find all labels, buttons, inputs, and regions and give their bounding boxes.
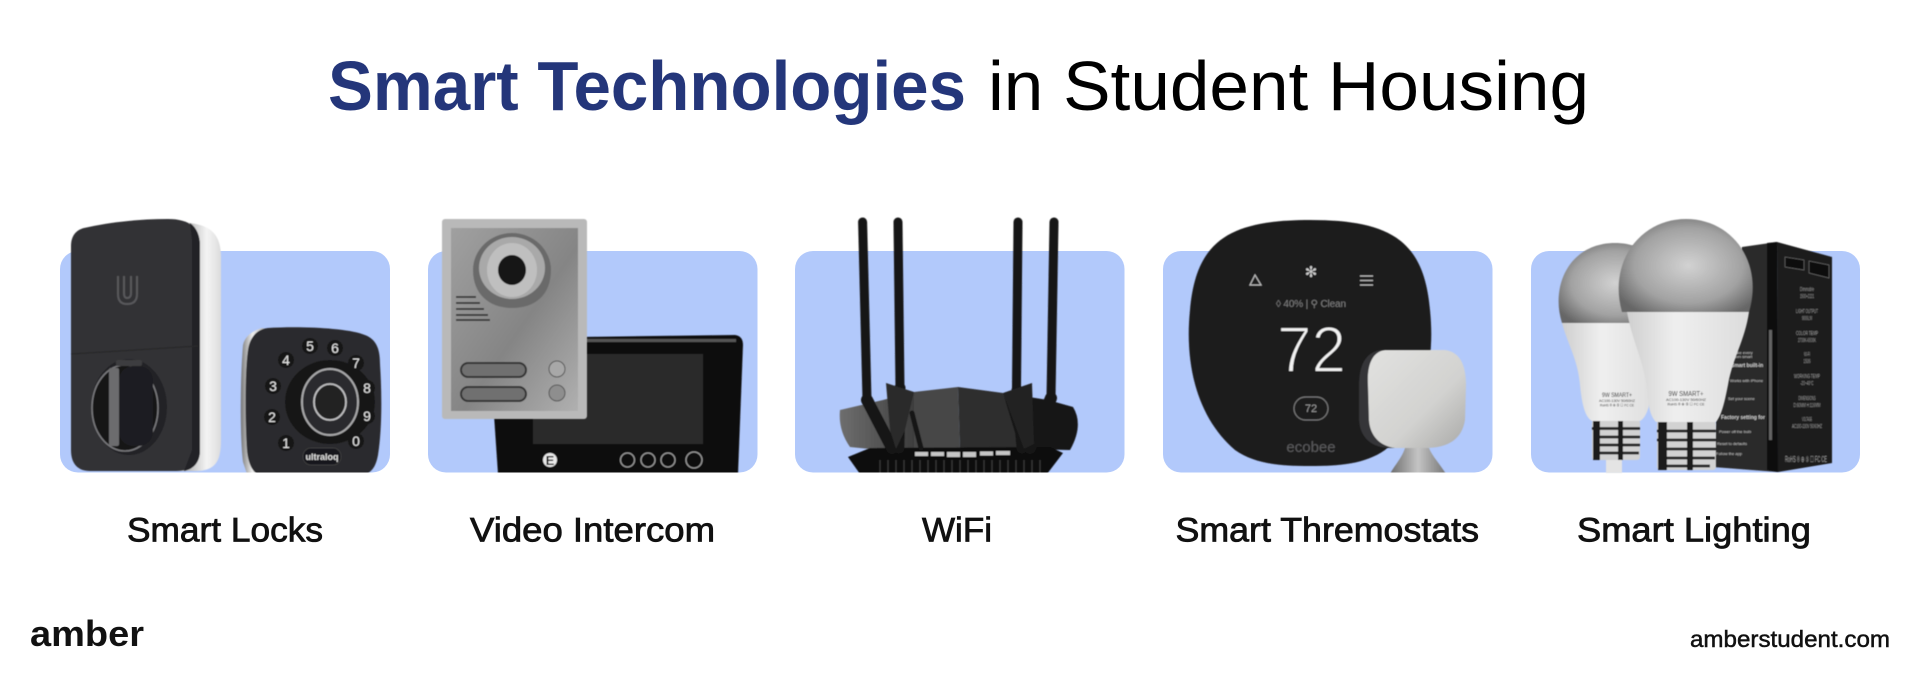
icon: intercom monitor: E: [546, 453, 555, 468]
panel: smart lighting: [1531, 219, 1860, 473]
icon: intercom monitor: [494, 335, 743, 474]
icon: ecobee thermostat: [1189, 220, 1431, 466]
icon: product box: 9006LM: [1802, 316, 1812, 322]
panel: smart thermostats: [1163, 220, 1492, 474]
icon: wifi router: [840, 222, 1078, 474]
icon: product box: 2700K-6500K: [1798, 338, 1816, 344]
icon: keypad lock: [241, 327, 381, 476]
icon: keypad lock: 7: [352, 355, 360, 371]
icon: product box: DIMENSIONS: [1798, 396, 1816, 402]
icon: product box: Set your scene: [1728, 396, 1755, 401]
logo: amber: amber: [30, 613, 144, 654]
icon: smart deadbolt: [71, 219, 221, 471]
icon: product box: 1500+2221: [1800, 294, 1814, 300]
icon: left light bulb: 9W SMART+: [1602, 392, 1632, 399]
panel: video intercom: [428, 219, 758, 474]
icon: product box: Power off the bulb: [1719, 429, 1752, 434]
icon: right light bulb: 9W SMART+: [1668, 391, 1704, 398]
icon: ecobee thermostat: ◊ 40% | ⚲ Clean: [1276, 299, 1346, 310]
icon: keypad lock: 9: [363, 408, 371, 424]
panel: smart locks: [60, 219, 390, 476]
icon: keypad lock: 0: [352, 433, 360, 449]
icon: right light bulb: RoHS ® ⊕ ⑤ ☐ FC CE: [1668, 402, 1705, 406]
label: smart thremostats: Smart Thremostats: [1176, 512, 1479, 550]
icon: product box: Dimmable: [1800, 287, 1814, 293]
icon: room sensor: [1359, 350, 1466, 474]
icon: keypad lock: 5: [306, 338, 314, 354]
icon: left light bulb: RoHS ® ⊕ ⑤ ☐ FC CE: [1600, 402, 1634, 408]
title: [328, 47, 1589, 125]
label: smart locks: Smart Locks: [127, 512, 323, 550]
icon: keypad lock: 3: [269, 378, 277, 394]
label: wifi: WiFi: [922, 512, 992, 550]
icon: keypad lock: 1: [282, 435, 290, 451]
panel: wifi: [795, 222, 1124, 474]
icon: right light bulb: AC100-130V 50/60HZ: [1666, 397, 1707, 402]
icon: product box: Reset to defaults: [1717, 441, 1747, 446]
icon: keypad lock: 2: [268, 409, 276, 425]
icon: product box: Works with iPhone: [1730, 378, 1764, 383]
icon: keypad lock: 6: [331, 340, 339, 356]
icon: product box: COLOR TEMP: [1796, 331, 1818, 337]
icon: product box: WI-FI: [1804, 352, 1810, 358]
icon: product box: Factory setting for: [1721, 415, 1765, 421]
label: video intercom: Video Intercom: [470, 512, 715, 550]
website url: amberstudent.com: [1690, 626, 1890, 652]
icon: ecobee thermostat: ✻: [1305, 264, 1317, 281]
icon: product box: room smart: [1732, 354, 1753, 359]
icon: left light bulb: [1559, 243, 1668, 473]
icon: product box: VOLTAGE: [1802, 417, 1812, 423]
icon: keypad lock: 4: [282, 352, 290, 368]
icon: product box: D:60MM H:116MM: [1794, 403, 1820, 409]
icon: keypad lock: ultraloq: [306, 452, 338, 462]
icon: product box: LIGHT OUTPUT: [1796, 309, 1818, 315]
icon: product box: RoHS ® ⊕ ⑤ ☐ FC CE: [1785, 455, 1827, 464]
icon: product box: AC100-130V 50/60HZ: [1792, 424, 1822, 430]
title: Smart Technologies: [328, 47, 966, 125]
icon: keypad lock: 8: [363, 380, 371, 396]
icon: door camera panel: [442, 219, 587, 419]
icon: ecobee thermostat: ecobee: [1286, 439, 1336, 456]
label: smart lighting: Smart Lighting: [1577, 512, 1811, 550]
icon: product box: Smart built-in: [1731, 363, 1763, 369]
icon: product box: -20~40°C: [1800, 381, 1814, 387]
icon: product box: Make every: [1732, 350, 1753, 355]
icon: ecobee thermostat: 72: [1277, 313, 1346, 386]
title: in Student Housing: [988, 47, 1589, 125]
icon: product box: WORKING TEMP: [1794, 374, 1820, 380]
icon: product box: 1536: [1804, 359, 1811, 365]
icon: product box: [1713, 242, 1832, 472]
icon: ecobee thermostat: 72: [1305, 403, 1317, 415]
icon: right light bulb: [1619, 219, 1753, 470]
icon: left light bulb: AC100-130V 50/60HZ: [1599, 398, 1636, 403]
icon: product box: Follow the app: [1716, 451, 1743, 456]
